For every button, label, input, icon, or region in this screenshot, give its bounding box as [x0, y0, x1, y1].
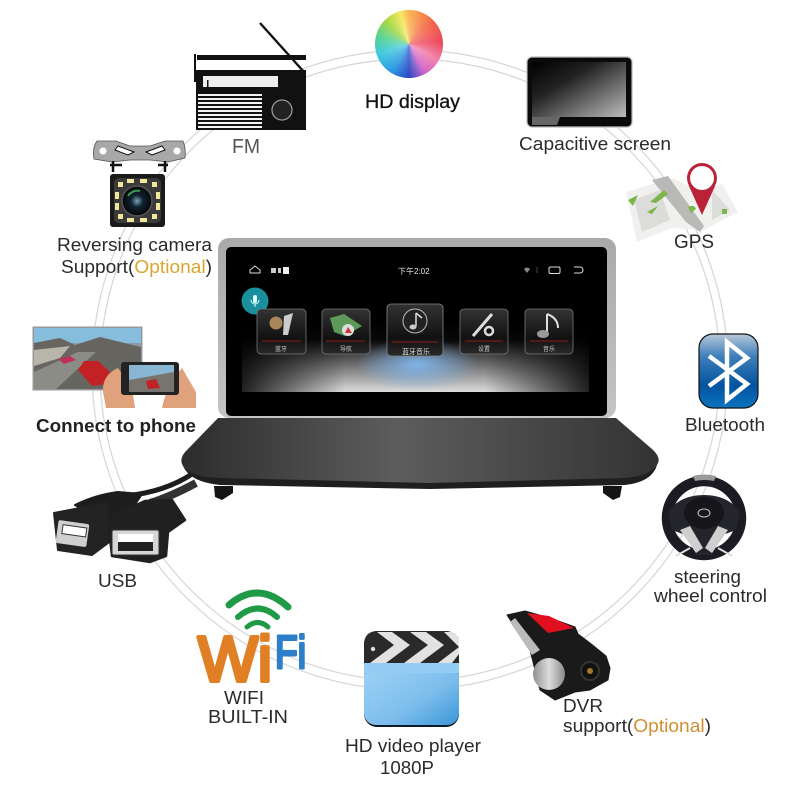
app icon: music — [525, 309, 573, 354]
bluetooth icon — [699, 334, 758, 408]
mounting legs — [214, 486, 622, 500]
label: WIFI BUILT-IN — [208, 688, 288, 727]
label: GPS: GPS — [674, 232, 714, 253]
silver bezel — [218, 238, 616, 418]
app icon: bluetooth music — [387, 304, 443, 356]
app icon: music: 音乐 — [543, 345, 555, 353]
DVR icon — [507, 611, 610, 700]
label: DVR support (Optional): support(Optional) — [563, 715, 711, 736]
label: WIFI BUILT-IN: WIFI — [224, 688, 264, 708]
label: steering wheel control: steering — [674, 566, 741, 587]
radio icon — [194, 23, 306, 130]
app icon: bluetooth music: 蓝牙音乐 — [402, 347, 430, 356]
microphone button — [242, 288, 268, 314]
label: HD video player 1080P: 1080P — [380, 757, 434, 778]
status bar — [250, 266, 583, 276]
WiFi icon: Wi — [198, 623, 272, 695]
label: WIFI BUILT-IN: BUILT-IN — [208, 707, 288, 727]
connecting rings — [92, 50, 728, 690]
connect to phone icon — [33, 327, 196, 408]
label: HD video player 1080P — [345, 735, 481, 778]
label: steering wheel control — [653, 566, 767, 606]
dashboard panel — [181, 418, 659, 487]
app icon: navigation — [322, 309, 370, 354]
app icon: navigation: 导航 — [340, 345, 352, 353]
label: USB: USB — [98, 570, 137, 591]
label: Reversing camera Support (Optional): Support(Optional) — [61, 256, 212, 277]
wallpaper floor — [242, 320, 589, 392]
app icon: bluetooth: 蓝牙 — [275, 345, 287, 353]
label: FM: FM — [232, 136, 260, 158]
label: steering wheel control: wheel control — [653, 585, 767, 606]
WiFi icon — [198, 593, 306, 695]
app icon: settings — [460, 309, 508, 354]
black screen — [226, 247, 607, 416]
app icon: bluetooth — [257, 309, 306, 354]
label: Reversing camera Support (Optional) — [57, 234, 213, 277]
label: Capacitive screen: Capacitive screen — [519, 133, 671, 154]
USB cable — [150, 483, 196, 503]
color wheel icon — [375, 10, 443, 78]
label: DVR support (Optional): DVR — [563, 695, 603, 716]
label: HD video player 1080P: HD video player — [345, 735, 481, 756]
steering wheel icon — [667, 474, 741, 556]
label: Bluetooth: Bluetooth — [685, 414, 765, 435]
WiFi icon: Fi — [275, 626, 306, 678]
USB icon — [54, 492, 185, 562]
label: DVR support (Optional) — [563, 695, 711, 736]
central head unit — [125, 238, 659, 503]
label: Reversing camera Support (Optional): Reversing camera — [57, 234, 213, 255]
app icon: settings: 设置 — [478, 345, 490, 353]
capacitive screen icon — [527, 57, 632, 127]
video clapper icon — [364, 631, 459, 727]
label: HD display: HD display — [365, 92, 461, 113]
label: Connect to phone: Connect to phone — [36, 415, 196, 436]
reversing camera icon — [93, 141, 185, 227]
status bar: 下午2:02 — [398, 266, 430, 276]
GPS map icon — [626, 163, 738, 242]
